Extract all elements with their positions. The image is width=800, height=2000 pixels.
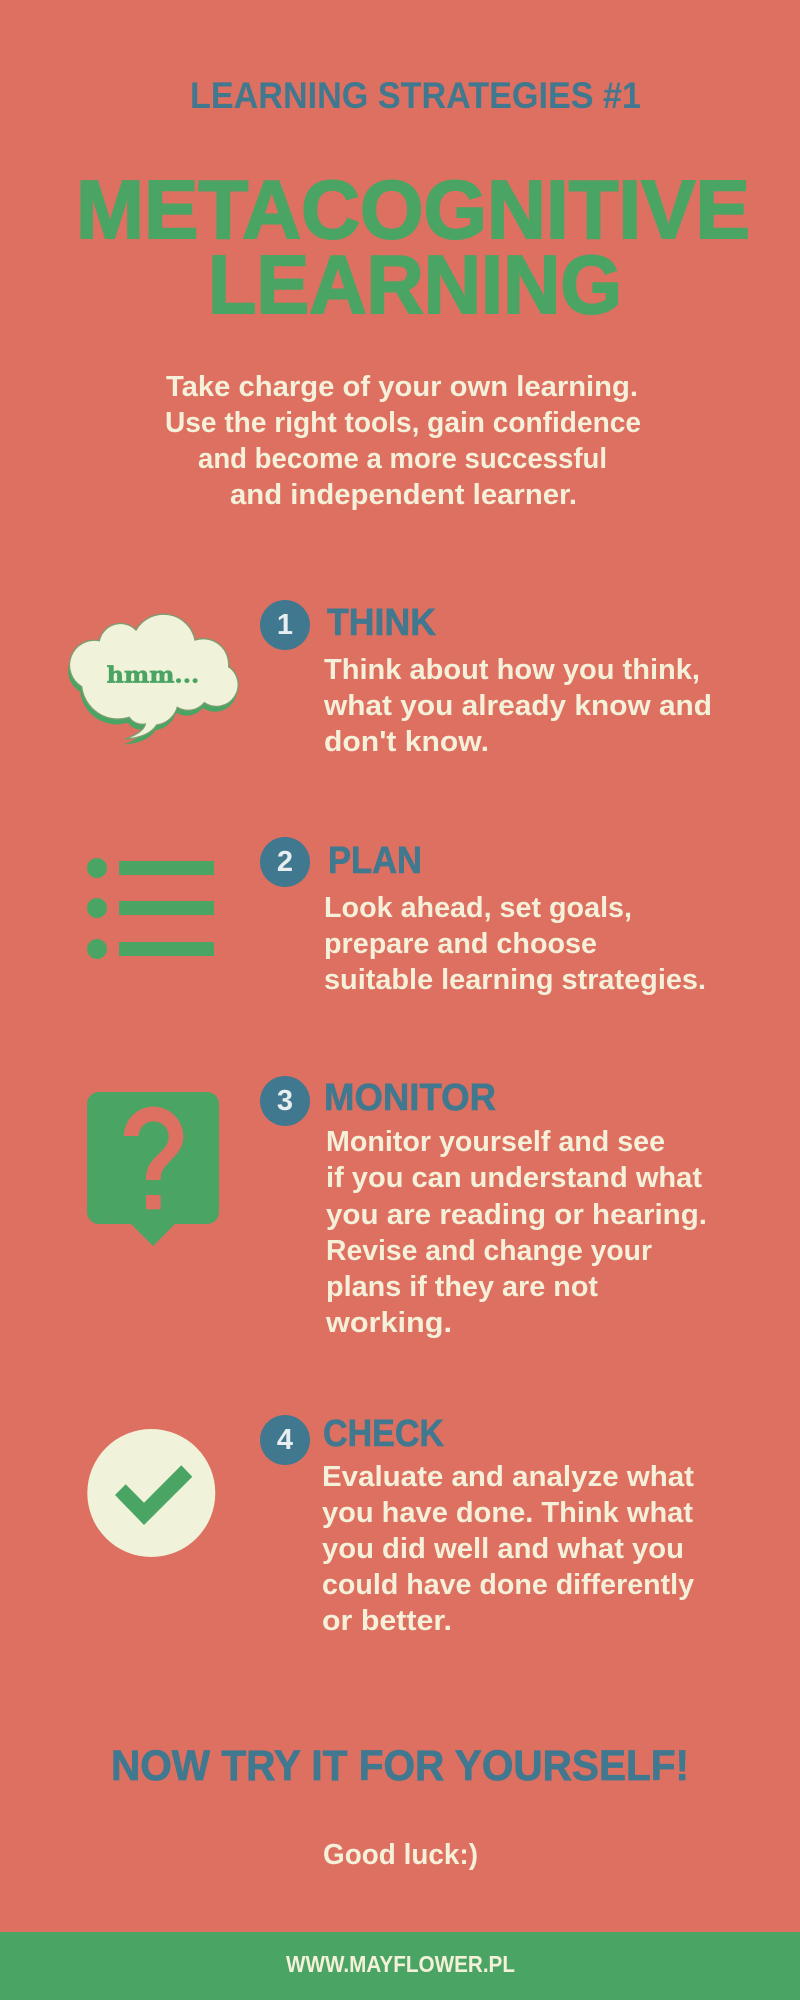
- eyebrow heading: LEARNING STRATEGIES #1: [190, 75, 641, 116]
- number badge 4: 4: [277, 1424, 293, 1456]
- number badge 2: 2: [277, 846, 293, 878]
- think description: what you already know and: [323, 690, 712, 722]
- number badge 2: [260, 837, 310, 887]
- call to action: NOW TRY IT FOR YOURSELF!: [111, 1742, 689, 1790]
- heading: plan: PLAN: [328, 840, 422, 882]
- monitor description: working.: [325, 1307, 452, 1339]
- check description: you have done. Think what: [322, 1497, 693, 1529]
- icon: thought cloud: [68, 614, 238, 744]
- icon: thought cloud: hmm...: [107, 662, 199, 688]
- plan description: Look ahead, set goals,: [324, 892, 632, 924]
- number badge 1: [260, 600, 310, 650]
- intro text: Use the right tools, gain confidence: [165, 407, 641, 439]
- panel: think: [68, 600, 712, 758]
- heading: think: THINK: [327, 602, 437, 644]
- icon: question bubble: [87, 1092, 219, 1246]
- monitor description: Revise and change your: [326, 1235, 652, 1267]
- heading: monitor: MONITOR: [324, 1077, 496, 1119]
- check description: you did well and what you: [322, 1533, 684, 1565]
- number badge 3: [260, 1076, 310, 1126]
- check description: or better.: [322, 1605, 452, 1637]
- icon: checklist: [87, 858, 214, 959]
- intro text: [165, 371, 641, 511]
- monitor description: if you can understand what: [326, 1162, 702, 1194]
- number badge 1: 1: [277, 609, 293, 641]
- monitor description: Monitor yourself and see: [326, 1126, 665, 1158]
- heading: check: CHECK: [323, 1413, 444, 1455]
- footer band: WWW.MAYFLOWER.PL: [286, 1951, 515, 1977]
- main title: [76, 163, 750, 331]
- panel: plan: [87, 837, 706, 996]
- intro text: and independent learner.: [230, 479, 577, 511]
- icon: check mark circle: [87, 1429, 215, 1557]
- plan description: suitable learning strategies.: [324, 964, 706, 996]
- think description: don't know.: [324, 726, 489, 758]
- think description: [323, 654, 712, 758]
- check description: Evaluate and analyze what: [322, 1461, 694, 1493]
- footer band: [0, 1932, 800, 2000]
- intro text: and become a more successful: [198, 443, 607, 475]
- plan description: prepare and choose: [324, 928, 597, 960]
- number badge 4: [260, 1415, 310, 1465]
- monitor description: [325, 1126, 707, 1339]
- monitor description: you are reading or hearing.: [326, 1199, 707, 1231]
- think description: Think about how you think,: [324, 654, 700, 686]
- check description: could have done differently: [322, 1569, 694, 1601]
- monitor description: plans if they are not: [326, 1271, 598, 1303]
- sign-off: Good luck:): [323, 1839, 478, 1871]
- main title: METACOGNITIVE: [76, 163, 750, 256]
- main title: LEARNING: [208, 238, 622, 331]
- number badge 3: 3: [277, 1085, 293, 1117]
- panel: monitor: [87, 1076, 707, 1339]
- plan description: [324, 892, 706, 996]
- panel: check: [87, 1413, 694, 1637]
- intro text: Take charge of your own learning.: [166, 371, 638, 403]
- check description: [322, 1461, 694, 1637]
